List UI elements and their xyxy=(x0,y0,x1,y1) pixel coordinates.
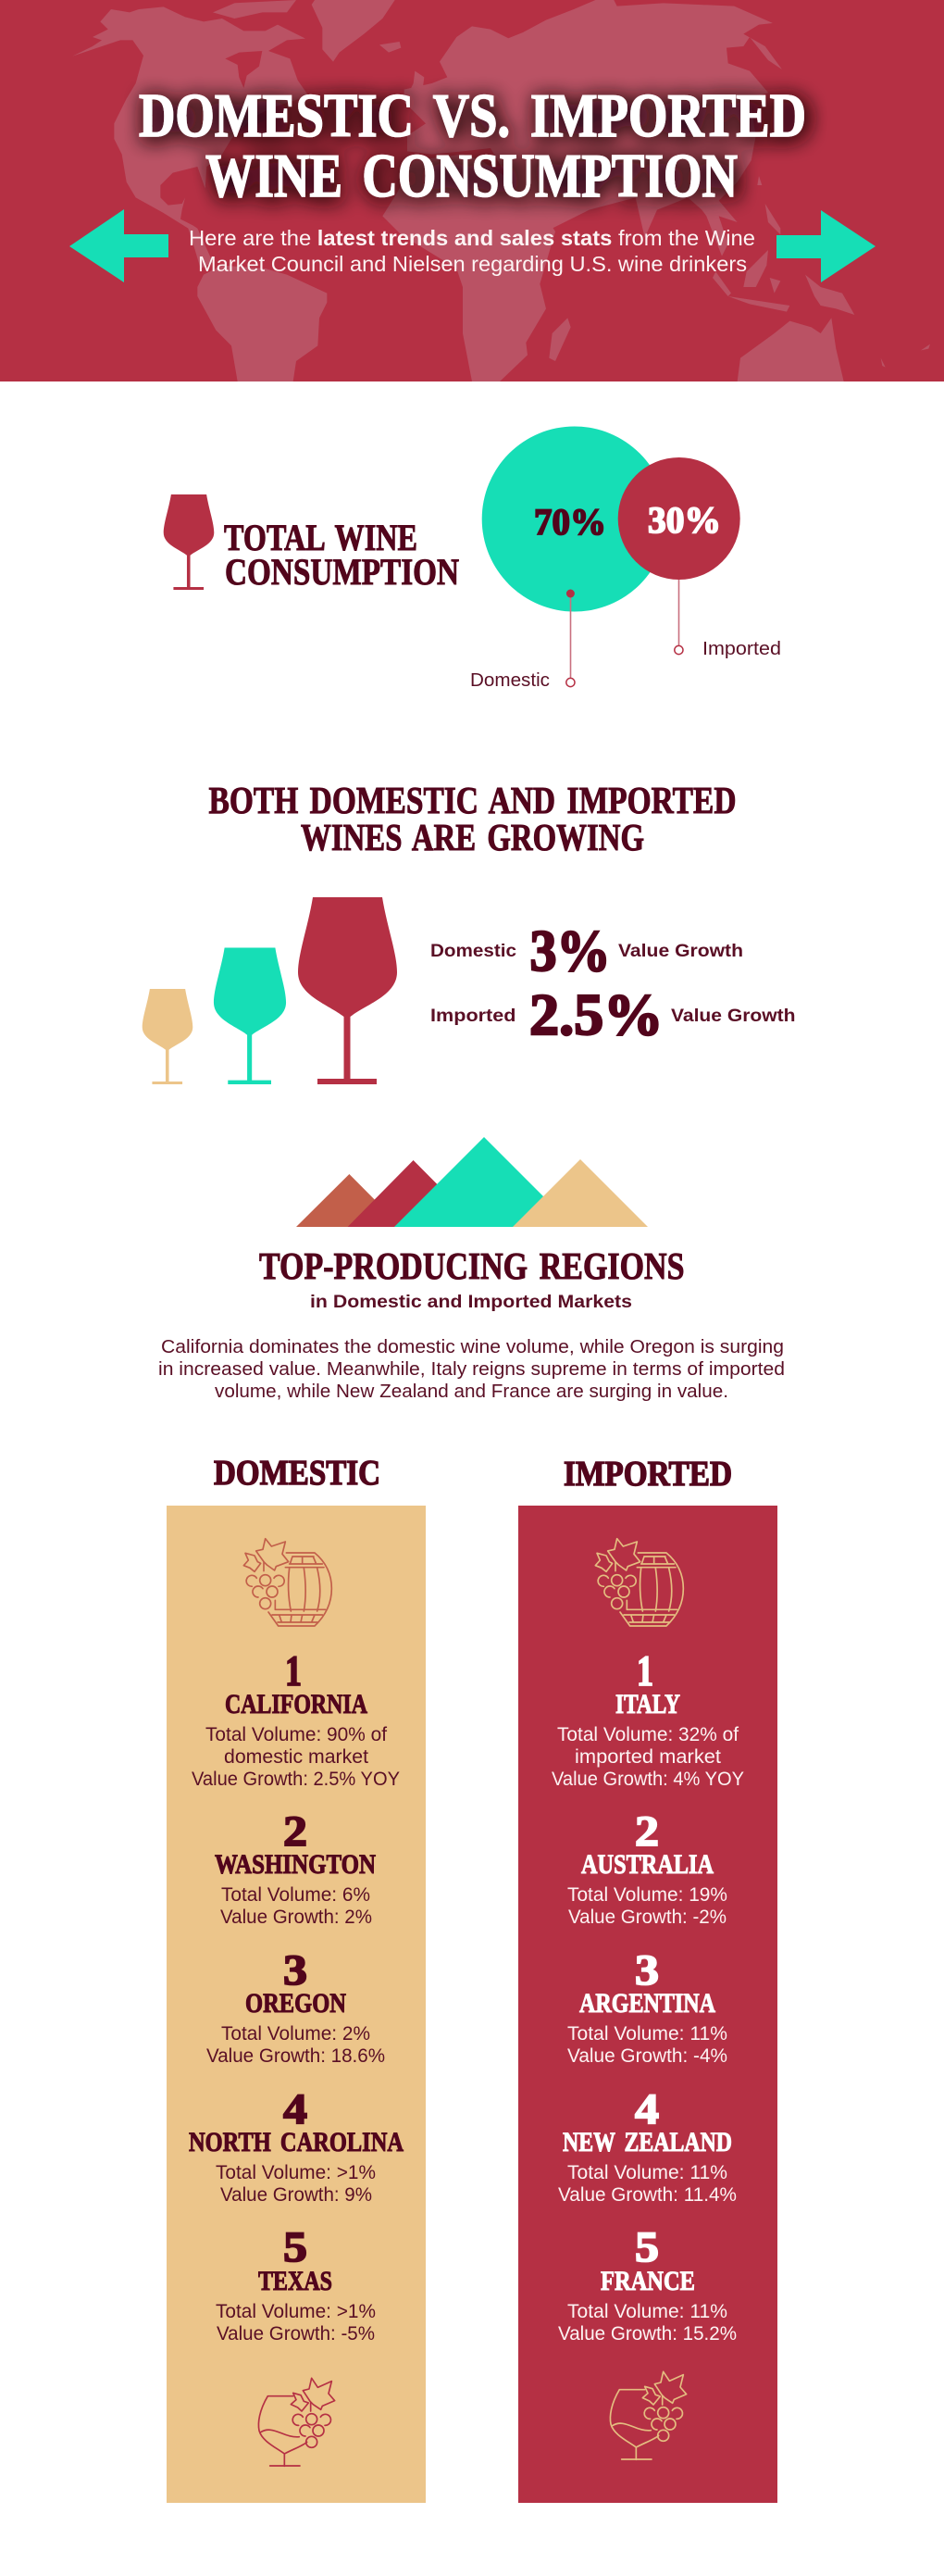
rank 4: New Zealand: Total Volume: 11% xyxy=(567,2162,727,2183)
title xyxy=(139,81,806,210)
callout: imported: Imported xyxy=(702,638,781,659)
rank 1: Italy: ITALY xyxy=(615,1689,680,1719)
rank 1: California: Value Growth: 2.5% YOY xyxy=(192,1769,400,1790)
heading: top-producing regions: TOP-PRODUCING REGIONS xyxy=(259,1244,685,1287)
rank 1: Italy: Value Growth: 4% YOY xyxy=(552,1769,744,1790)
rank 5: Texas: 5 xyxy=(283,2223,307,2271)
rank 1: California xyxy=(192,1647,400,1790)
chart: imported circle 30%: 30% xyxy=(648,499,721,541)
rank 4: New Zealand xyxy=(558,2085,737,2206)
rank 3: Argentina: ARGENTINA xyxy=(579,1988,715,2019)
icon: wine glass and grapes xyxy=(258,2378,335,2466)
rank 4: North Carolina: Value Growth: 9% xyxy=(220,2184,372,2206)
heading: imported: IMPORTED xyxy=(564,1455,732,1494)
rank 1: California: domestic market xyxy=(224,1746,368,1768)
panel: domestic ranking xyxy=(167,1506,426,2503)
title: DOMESTIC VS. IMPORTED xyxy=(139,81,806,150)
rank 4: North Carolina xyxy=(189,2085,404,2206)
chart: domestic circle 70% xyxy=(482,426,667,611)
chart: imported circle 30% xyxy=(618,457,740,580)
rank 3: Oregon xyxy=(206,1946,385,2067)
icon: barrel and grapes xyxy=(595,1539,683,1626)
rank 4: North Carolina: Total Volume: >1% xyxy=(216,2162,376,2183)
rank 4: North Carolina: NORTH CAROLINA xyxy=(189,2127,404,2157)
rank 1: California: CALIFORNIA xyxy=(225,1689,367,1719)
heading: both growing: BOTH DOMESTIC AND IMPORTED xyxy=(209,779,737,821)
stat: imported growth xyxy=(430,982,796,1047)
rank 2: Australia xyxy=(567,1807,727,1928)
stat: imported growth: Imported xyxy=(430,1006,516,1026)
heading: domestic: DOMESTIC xyxy=(214,1454,380,1493)
rank 5: Texas: Total Volume: >1% xyxy=(216,2301,376,2322)
rank 4: New Zealand: Value Growth: 11.4% xyxy=(558,2184,737,2206)
heading: total wine consumption: CONSUMPTION xyxy=(225,551,459,593)
rank 5: France: FRANCE xyxy=(601,2266,695,2296)
rank 3: Oregon: OREGON xyxy=(245,1988,346,2019)
panel: total wine consumption xyxy=(164,426,781,691)
rank 3: Oregon: Value Growth: 18.6% xyxy=(206,2045,385,2067)
rank 5: France: Value Growth: 15.2% xyxy=(558,2323,737,2345)
subtitle: Here are the latest trends and sales stats from the Wine xyxy=(189,226,755,250)
intro paragraph: in increased value. Meanwhile, Italy reigns supreme in terms of imported xyxy=(158,1359,785,1380)
intro paragraph xyxy=(158,1337,785,1402)
stat: imported growth: Value Growth xyxy=(671,1006,796,1026)
rank 3: Argentina: Value Growth: -4% xyxy=(567,2045,727,2067)
rank 3: Oregon: Total Volume: 2% xyxy=(221,2023,370,2045)
stat: domestic growth: Value Growth xyxy=(618,941,743,961)
rank 1: California: 1 xyxy=(285,1647,302,1695)
rank 1: Italy: 1 xyxy=(637,1647,653,1695)
rank 3: Argentina: 3 xyxy=(635,1946,659,1995)
heading: both growing: WINES ARE GROWING xyxy=(301,816,644,858)
rank 5: Texas xyxy=(216,2223,376,2345)
stat: imported growth: 2.5% xyxy=(529,982,663,1047)
rank 3: Oregon: 3 xyxy=(283,1946,307,1995)
rank 2: Washington: Value Growth: 2% xyxy=(220,1907,372,1928)
rank 2: Australia: Total Volume: 19% xyxy=(567,1884,727,1906)
rank 2: Australia: 2 xyxy=(635,1807,659,1856)
subtitle xyxy=(189,226,755,276)
subtitle: Market Council and Nielsen regarding U.S. wine drinkers xyxy=(198,252,747,276)
world map background xyxy=(72,0,930,381)
icon: medium green glass xyxy=(214,948,286,1084)
intro paragraph: volume, while New Zealand and France are surging in value. xyxy=(215,1382,728,1402)
rank 4: North Carolina: 4 xyxy=(283,2085,307,2133)
icon: large red glass xyxy=(298,897,397,1084)
rank 1: Italy: imported market xyxy=(575,1746,721,1768)
rank 2: Australia: AUSTRALIA xyxy=(581,1849,714,1880)
heading: both growing xyxy=(209,779,737,858)
stat: domestic growth: 3% xyxy=(529,918,611,983)
heading: total wine consumption xyxy=(224,517,459,593)
icon: left arrow xyxy=(69,209,168,282)
heading: total wine consumption: TOTAL WINE xyxy=(224,517,417,558)
stat: domestic growth xyxy=(430,918,743,983)
rank 3: Argentina: Total Volume: 11% xyxy=(567,2023,727,2045)
icon: small tan glass xyxy=(143,989,193,1084)
chart: domestic circle 70%: 70% xyxy=(534,501,606,543)
rank 4: New Zealand: NEW ZEALAND xyxy=(563,2127,732,2157)
title: WINE CONSUMPTION xyxy=(205,142,738,210)
panel: both growing xyxy=(143,779,795,1084)
rank 5: France: 5 xyxy=(635,2223,659,2271)
icon: right arrow xyxy=(776,210,876,282)
icon: wine glass and grapes xyxy=(610,2371,687,2459)
rank 5: Texas: Value Growth: -5% xyxy=(217,2323,375,2345)
rank 1: California: Total Volume: 90% of xyxy=(205,1724,387,1745)
rank 4: New Zealand: 4 xyxy=(635,2085,659,2133)
rank 5: France xyxy=(558,2223,737,2345)
callout: domestic: Domestic xyxy=(470,669,550,691)
panel: imported ranking xyxy=(518,1506,777,2503)
rank 5: France: Total Volume: 11% xyxy=(567,2301,727,2322)
callout: imported xyxy=(675,580,781,659)
rank 1: Italy xyxy=(552,1647,744,1790)
stat: domestic growth: Domestic xyxy=(430,941,516,961)
subheading: in Domestic and Imported Markets xyxy=(310,1292,632,1312)
rank 2: Australia: Value Growth: -2% xyxy=(568,1907,727,1928)
rank 2: Washington: WASHINGTON xyxy=(215,1849,376,1880)
icon: barrel and grapes xyxy=(243,1539,331,1626)
callout: domestic xyxy=(470,589,575,691)
rank 5: Texas: TEXAS xyxy=(258,2266,332,2296)
rank 2: Washington: 2 xyxy=(283,1807,307,1856)
panel: header banner xyxy=(0,0,944,381)
rank 2: Washington xyxy=(215,1807,376,1928)
rank 1: Italy: Total Volume: 32% of xyxy=(557,1724,739,1745)
icon: mountains xyxy=(296,1137,648,1227)
rank 2: Washington: Total Volume: 6% xyxy=(221,1884,370,1906)
panel: top-producing regions intro xyxy=(158,1137,785,1402)
rank 3: Argentina xyxy=(567,1946,727,2067)
icon: wine glass xyxy=(164,494,214,590)
intro paragraph: California dominates the domestic wine volume, while Oregon is surging xyxy=(161,1337,784,1357)
